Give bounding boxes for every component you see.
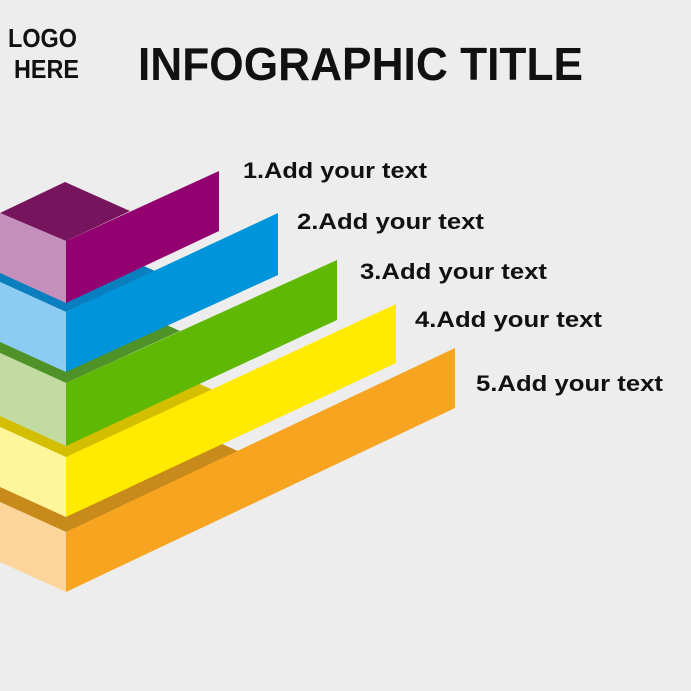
layer 2: blue [0,213,278,372]
layer 5: orange [0,348,455,592]
title: INFOGRAPHIC TITLE [138,38,583,90]
logo: HERE [14,54,79,84]
label 5: 5.Add your text [476,371,664,396]
label 2: 2.Add your text [297,209,485,234]
label 4: 4.Add your text [415,307,603,332]
layer 1: purple [0,171,219,303]
label 3: 3.Add your text [360,259,548,284]
logo: LOGO [8,23,77,53]
logo [8,23,79,84]
layer 4: yellow [0,304,396,517]
layer 3: green [0,260,337,446]
label 1: 1.Add your text [243,158,428,183]
